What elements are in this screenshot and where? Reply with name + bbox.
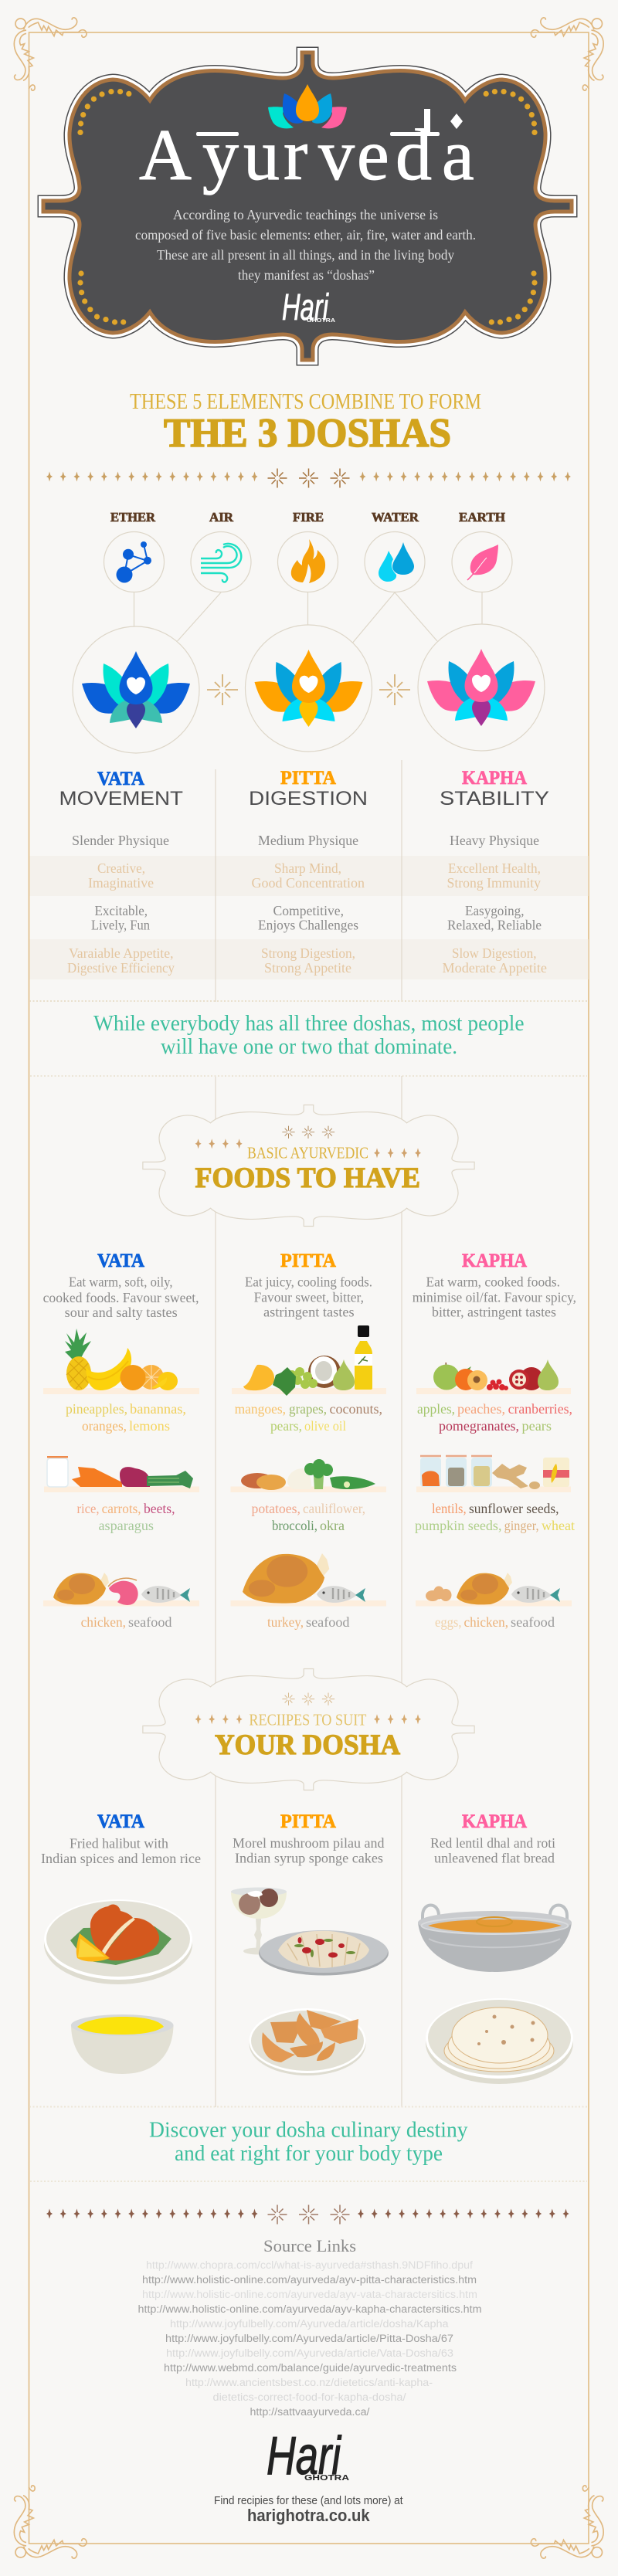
panel: vata foods: rice, <box>77 1501 99 1516</box>
panel: pitta properties: Strong Appetite <box>264 960 351 976</box>
panel: pitta properties: Good Concentration <box>252 875 365 891</box>
icon: protein group <box>243 1553 365 1604</box>
icon: lemon rice bowl <box>71 2014 173 2074</box>
panel: pitta foods: olive oil <box>304 1418 346 1434</box>
panel: pitta foods: Eat juicy, cooling foods. <box>245 1274 372 1289</box>
icon: sweet pastries plate <box>249 2008 366 2075</box>
panel: pitta foods: broccoli, <box>272 1518 317 1533</box>
intro text: composed of five basic elements: ether, air, fire, water and earth. <box>135 227 476 243</box>
source links: http://www.holistic-online.com/ayurveda/ayv-kapha-charactersitics.htm <box>138 2303 482 2315</box>
intro text: they manifest as “doshas” <box>238 267 375 283</box>
panel: vata foods: cooked foods. Favour sweet, <box>43 1290 199 1305</box>
panel: vata foods: sour and salty tastes <box>65 1305 178 1320</box>
icon: title lotus <box>268 84 347 128</box>
panel: pitta properties: DIGESTION <box>249 788 368 809</box>
footer call to action: Find recipies for these (and lots more) at <box>214 2495 403 2507</box>
panel: kapha recipes: Red lentil dhal and roti <box>430 1835 555 1851</box>
panel: kapha foods: seafood <box>511 1614 555 1630</box>
icon: pitta lotus <box>255 650 363 727</box>
panel: vata foods: banannas, <box>130 1401 186 1417</box>
panel: pitta foods: mangoes, <box>235 1401 286 1417</box>
panel: kapha properties: Heavy Physique <box>450 833 539 848</box>
panel: kapha recipes: KAPHA <box>462 1811 527 1832</box>
icon: dhal kadai <box>418 1905 572 1972</box>
panel: kapha foods: chicken, <box>464 1614 508 1630</box>
panel: pitta recipes <box>231 1811 389 2075</box>
panel: kapha foods: eggs, <box>435 1614 462 1630</box>
footer call to action <box>214 2495 403 2525</box>
source links <box>138 2236 482 2418</box>
panel: pitta foods: cauliflower, <box>303 1501 365 1516</box>
icon: ether molecule <box>116 541 151 582</box>
panel: vata foods: asparagus <box>99 1518 154 1533</box>
source links: http://www.joyfulbelly.com/Ayurveda/article/dosha/Kapha <box>170 2318 449 2330</box>
panel: pitta foods: grapes, <box>289 1401 327 1417</box>
panel: kapha foods: ginger, <box>504 1518 539 1533</box>
icon: roti plate <box>426 1998 573 2084</box>
logo: Hari Ghotra white: Hari <box>282 287 329 328</box>
callout: discover your dosha <box>149 2118 468 2166</box>
callout: dominant doshas: will have one or two that dominate. <box>161 1034 457 1059</box>
panel: kapha properties: Excellent Health, <box>448 860 541 876</box>
star <box>207 674 238 705</box>
panel: kapha foods: KAPHA <box>462 1251 527 1271</box>
panel: pitta foods <box>230 1251 386 1630</box>
panel: kapha foods: minimise oil/fat. Favour spicy, <box>413 1290 576 1305</box>
dotted dividers <box>29 1001 589 2181</box>
panel: kapha foods: pumpkin seeds, <box>415 1518 502 1533</box>
panel: pitta properties <box>249 768 368 976</box>
panel: pitta properties: Strong Digestion, <box>261 945 355 961</box>
heading: the 3 doshas <box>130 389 481 456</box>
panel: kapha foods: sunflower seeds, <box>469 1501 559 1516</box>
panel: vata properties: Digestive Efficiency <box>67 960 175 976</box>
panel: fire: FIRE <box>293 510 324 524</box>
source links: http://www.ancientsbest.co.nz/dietetics/anti-kapha- <box>185 2377 433 2388</box>
panel: kapha foods: peaches, <box>457 1401 505 1417</box>
panel: foods plaque: BASIC AYURVEDIC <box>247 1143 368 1162</box>
icon: wind <box>201 544 241 582</box>
icon: pulses, seeds and spices group <box>420 1456 569 1489</box>
panel: pitta foods: pears, <box>270 1418 302 1434</box>
panel: recipes plaque <box>144 1670 473 1789</box>
icon: kapha lotus <box>427 649 535 726</box>
shelves <box>230 1388 386 1607</box>
panel: pitta lotus <box>246 625 372 752</box>
panel: vata foods: chicken, <box>81 1614 126 1630</box>
panel: pitta properties: Medium Physique <box>258 833 358 848</box>
panel: foods plaque <box>144 1106 473 1225</box>
panel: kapha properties: Moderate Appetite <box>442 960 547 976</box>
icon: vata lotus <box>82 651 190 728</box>
panel: pitta properties: Sharp Mind, <box>274 860 341 876</box>
panel: vata foods: carrots, <box>102 1501 141 1516</box>
panel: kapha properties: Easygoing, <box>465 903 524 918</box>
icon: vegetables group <box>241 1459 375 1490</box>
panel: vata properties: MOVEMENT <box>59 788 183 809</box>
panel: earth <box>452 510 512 592</box>
panel: vata properties: Varaiable Appetite, <box>69 945 173 961</box>
panel: kapha foods: apples, <box>417 1401 455 1417</box>
heading: the 3 doshas: THE 3 DOSHAS <box>164 411 451 456</box>
panel: kapha properties: KAPHA <box>462 768 527 789</box>
panel: pitta foods: potatoes, <box>252 1501 301 1516</box>
panel: kapha foods: bitter, astringent tastes <box>432 1305 556 1320</box>
intro text: These are all present in all things, and in the living body <box>157 247 454 263</box>
panel: pitta foods: coconuts, <box>329 1401 382 1417</box>
icon: halibut plate <box>44 1899 192 1984</box>
source links: http://www.holistic-online.com/ayurveda/ayv-pitta-characteristics.htm <box>142 2274 477 2286</box>
star <box>379 674 410 705</box>
panel: vata recipes: Indian spices and lemon rice <box>41 1851 201 1866</box>
panel: kapha lotus <box>418 624 545 751</box>
panel: kapha foods: lentils, <box>432 1501 467 1516</box>
panel: pitta foods: PITTA <box>280 1251 336 1271</box>
panel: pitta recipes: Indian syrup sponge cakes <box>235 1851 383 1866</box>
source links: http://www.joyfulbelly.com/Ayurveda/article/Vata-Dosha/63 <box>166 2347 453 2359</box>
callout: discover your dosha: and eat right for your body type <box>175 2141 443 2166</box>
panel: earth: EARTH <box>459 510 505 524</box>
panel: air: AIR <box>209 510 234 524</box>
icon: fruit group <box>243 1325 372 1396</box>
source links: http://www.holistic-online.com/ayurveda/ayv-vata-charactersitics.htm <box>142 2289 477 2300</box>
icon: vegetables group <box>47 1456 193 1488</box>
panel: pitta foods: okra <box>320 1518 345 1533</box>
divider <box>46 2204 569 2225</box>
connector lines <box>134 592 482 643</box>
source links: Source Links <box>263 2236 356 2255</box>
panel: kapha foods: cranberries, <box>508 1401 572 1417</box>
panel: kapha properties: Relaxed, Reliable <box>447 918 542 933</box>
panel: kapha foods <box>413 1251 576 1630</box>
intro text: According to Ayurvedic teachings the universe is <box>173 207 438 222</box>
title: Ayurveda <box>139 115 474 195</box>
intro text <box>135 207 476 283</box>
panel: pitta foods: turkey, <box>267 1614 304 1630</box>
panel: vata recipes: Fried halibut with <box>70 1835 168 1851</box>
panel: fire <box>278 510 338 592</box>
footer call to action: harighotra.co.uk <box>247 2506 370 2525</box>
source links: http://www.chopra.com/ccl/what-is-ayurveda#sthash.9NDFfiho.dpuf <box>146 2259 473 2271</box>
panel: ether <box>104 510 164 592</box>
shelves <box>43 1388 199 1607</box>
panel: recipes plaque: RECIIPES TO SUIT <box>249 1711 367 1729</box>
source links: http://sattvaayurveda.ca/ <box>250 2406 370 2418</box>
panel: vata recipes <box>41 1811 201 2074</box>
table bands <box>29 856 589 979</box>
panel: title plaque <box>43 53 572 360</box>
panel: kapha foods: Eat warm, cooked foods. <box>426 1274 560 1289</box>
panel: vata foods <box>43 1251 199 1630</box>
icon: fruit group <box>433 1359 559 1390</box>
icon: protein group <box>426 1573 560 1604</box>
logo: Hari Ghotra black: GHOTRA <box>304 2473 350 2483</box>
callout: dominant doshas: While everybody has all three doshas, most people <box>93 1011 524 1036</box>
panel: vata lotus <box>73 626 199 753</box>
panel: foods plaque: FOODS TO HAVE <box>195 1162 420 1194</box>
panel: pitta recipes: PITTA <box>280 1811 336 1832</box>
panel: vata foods: seafood <box>128 1614 172 1630</box>
panel: pitta recipes: Morel mushroom pilau and <box>233 1835 385 1851</box>
panel: pitta foods: Favour sweet, bitter, <box>254 1290 364 1305</box>
icon: water drops <box>379 542 414 582</box>
panel: vata properties <box>59 769 183 976</box>
icon: leaf <box>467 545 498 580</box>
panel: vata foods: Eat warm, soft, oily, <box>69 1274 173 1290</box>
icon: flame <box>291 539 325 583</box>
panel: vata properties: Imaginative <box>88 875 154 891</box>
decorative gold dots <box>77 89 538 325</box>
panel: vata properties: Slender Physique <box>72 833 169 848</box>
panel: vata properties: Creative, <box>97 860 145 876</box>
icon: fruit group <box>65 1329 178 1390</box>
heading: the 3 doshas: THESE 5 ELEMENTS COMBINE TO FORM <box>130 389 481 414</box>
panel: kapha properties: STABILITY <box>440 788 549 809</box>
panel: pitta foods: astringent tastes <box>263 1305 355 1320</box>
panel: vata foods: VATA <box>97 1251 144 1271</box>
panel: pitta properties: PITTA <box>280 768 336 789</box>
panel: kapha properties: Strong Immunity <box>447 875 541 891</box>
column lines <box>216 760 402 2107</box>
icon: protein group <box>53 1573 190 1605</box>
panel: ether: ETHER <box>110 510 156 524</box>
logo: Hari Ghotra white: GHOTRA <box>307 318 335 324</box>
source links: http://www.webmd.com/balance/guide/ayurvedic-treatments <box>164 2362 457 2374</box>
panel: recipes plaque: YOUR DOSHA <box>215 1729 400 1761</box>
panel: kapha recipes <box>418 1811 573 2084</box>
panel: vata foods: oranges, <box>82 1418 127 1434</box>
panel: vata recipes: VATA <box>97 1811 144 1832</box>
icon: syrup sponge dessert <box>231 1888 287 1954</box>
panel: kapha properties: Slow Digestion, <box>452 945 536 961</box>
panel: vata properties: Excitable, <box>94 903 148 918</box>
panel: vata foods: pineapples, <box>66 1401 127 1417</box>
panel: kapha foods: pomegranates, <box>439 1418 519 1434</box>
panel: water: WATER <box>372 510 419 524</box>
panel: pitta foods: seafood <box>306 1614 350 1630</box>
source links: dietetics-correct-food-for-kapha-dosha/ <box>213 2391 406 2403</box>
panel: kapha recipes: unleavened flat bread <box>434 1851 555 1866</box>
panel: vata foods: lemons <box>129 1418 170 1434</box>
panel: air <box>191 510 251 592</box>
callout: dominant doshas <box>93 1011 524 1059</box>
panel: vata foods: beets, <box>144 1501 175 1516</box>
panel: vata properties: VATA <box>97 769 144 789</box>
icon: mushroom pilau plate <box>259 1930 389 1976</box>
logo: Hari Ghotra black: Hari <box>267 2425 342 2486</box>
panel: pitta properties: Enjoys Challenges <box>258 918 358 933</box>
divider <box>46 468 571 488</box>
panel: pitta properties: Competitive, <box>273 903 344 918</box>
panel: kapha properties <box>440 768 549 976</box>
shelves <box>416 1388 572 1607</box>
panel: kapha foods: wheat <box>542 1518 575 1533</box>
panel: vata properties: Lively, Fun <box>91 918 150 933</box>
panel: kapha foods: pears <box>522 1418 552 1434</box>
panel: water <box>365 510 425 592</box>
callout: discover your dosha: Discover your dosha culinary destiny <box>149 2118 468 2143</box>
source links: http://www.joyfulbelly.com/Ayurveda/article/Pitta-Dosha/67 <box>165 2333 453 2344</box>
